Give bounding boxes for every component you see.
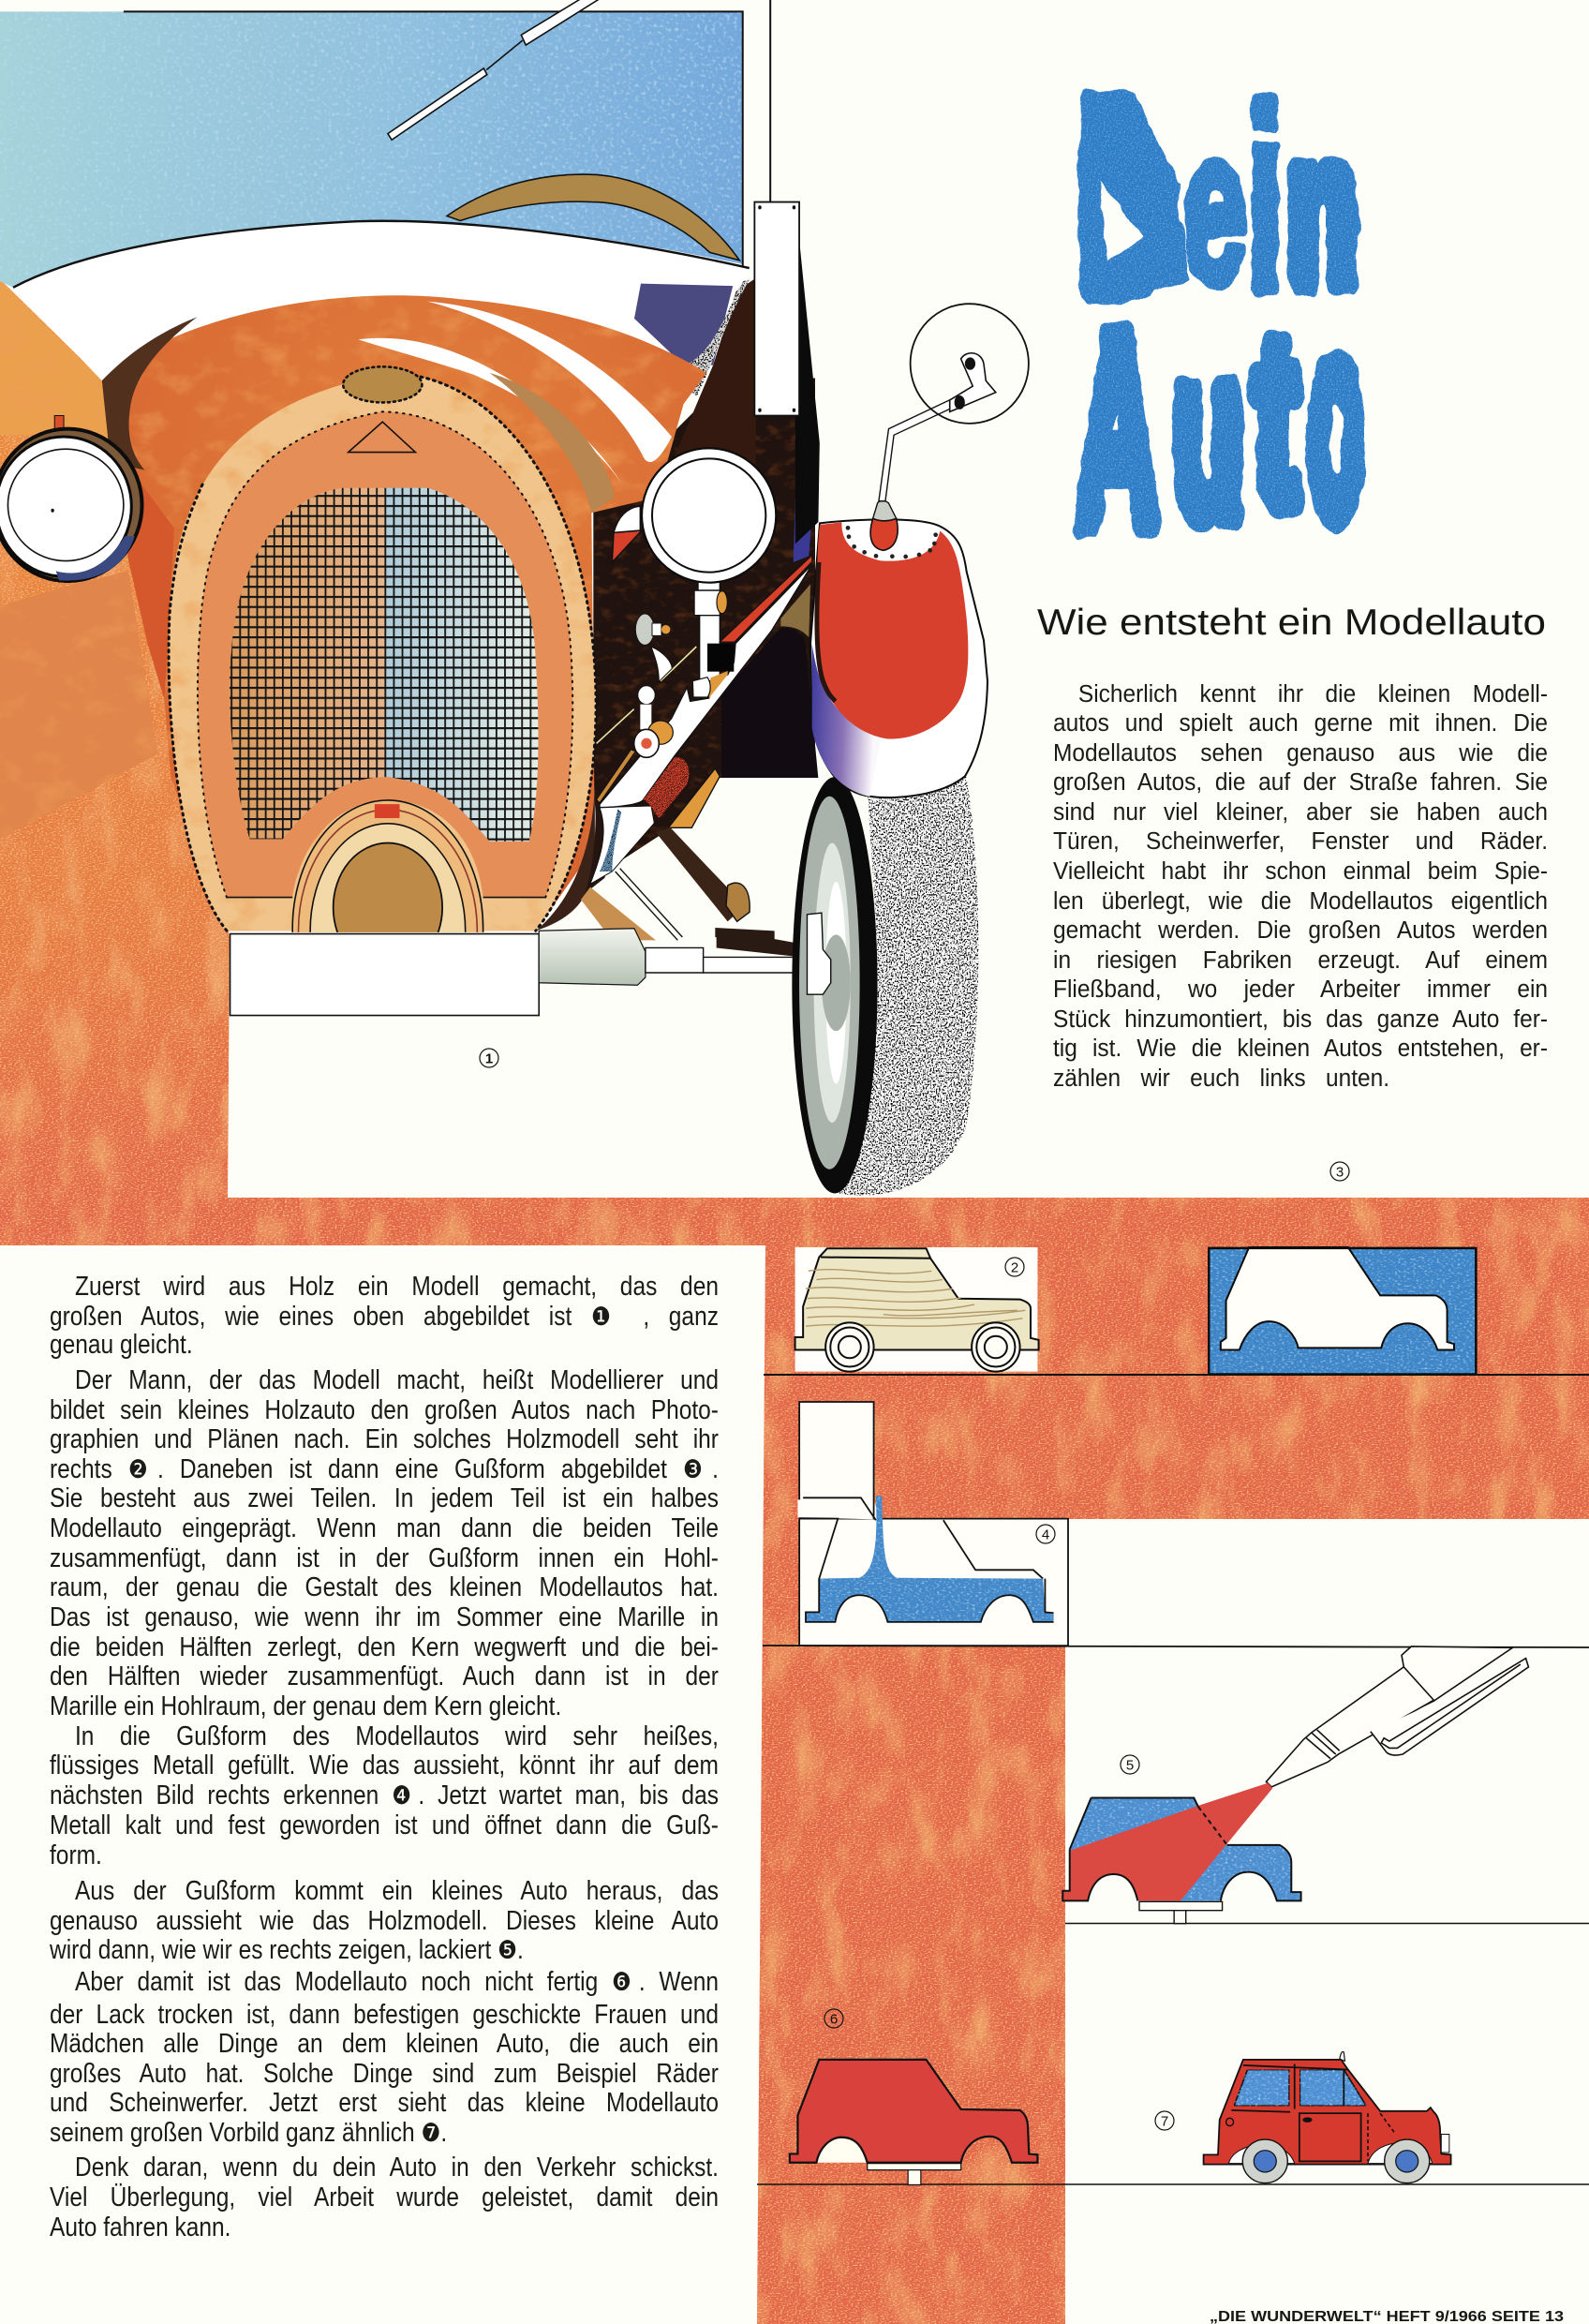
intro text block: in riesigen Fabriken erzeugt. Auf einem xyxy=(1053,947,1548,974)
main text block: Denk daran, wenn du dein Auto in den Verkehr schickst. xyxy=(75,2153,719,2182)
remaining letters: o xyxy=(1308,261,1364,575)
intro text block: len überlegt, wie die Modellautos eigentlich xyxy=(1053,888,1548,915)
step 2: wood model card xyxy=(795,1247,1039,1372)
main text block: Aus der Gußform kommt ein kleines Auto heraus, das xyxy=(75,1876,719,1906)
main text block: Mädchen alle Dinge an dem kleinen Auto, die auch ein xyxy=(50,2029,719,2059)
crank emblem xyxy=(291,799,483,932)
main text block: In die Gußform des Modellautos wird sehr heißes, xyxy=(75,1721,719,1751)
intro text block: Fließband, wo jeder Arbeiter immer ein xyxy=(1053,976,1548,1003)
ground lines xyxy=(757,1375,1589,2184)
D counter and shoulder xyxy=(1100,80,1195,261)
main text block: nächsten Bild rechts erkennen ❹. Jetzt wartet man, bis das xyxy=(50,1780,719,1810)
main text block: Metall kalt und fest geworden ist und öffnet dann die Guß- xyxy=(50,1810,719,1840)
left fender panels xyxy=(0,281,157,839)
main text block: Aber damit ist das Modellauto noch nicht fertig ❻. Wenn xyxy=(75,1967,719,1997)
cowl and hood xyxy=(13,221,756,931)
label 4 xyxy=(1036,1525,1055,1543)
intro text block: autos und spielt auch gerne mit ihnen. Die xyxy=(1053,710,1548,737)
spray gun xyxy=(1266,1646,1528,1787)
main text block: Zuerst wird aus Holz ein Modell gemacht, das den xyxy=(75,1272,719,1302)
number labels xyxy=(480,1049,1349,2130)
main text block: der Lack trocken ist, dann befestigen geschickte Frauen und xyxy=(50,2000,719,2030)
step 5: spray painting xyxy=(1062,1646,1528,1924)
main text block: raum, der genau die Gestalt des kleinen Modellautos hat. xyxy=(50,1572,719,1602)
radiator xyxy=(167,365,605,932)
intro text block: Vielleicht habt ihr schon einmal beim Spie- xyxy=(1053,858,1548,885)
main text block: Modellauto eingeprägt. Wenn man dann die beiden Teile xyxy=(50,1513,719,1543)
steering wheel xyxy=(447,174,739,261)
label 1 xyxy=(480,1049,498,1067)
label 3: 3 xyxy=(1336,1164,1344,1181)
main text block: Sie besteht aus zwei Teilen. In jedem Teil ist ein halbes xyxy=(50,1483,719,1513)
remaining letters xyxy=(1077,53,1364,578)
step 7: finished red car xyxy=(1204,2052,1451,2183)
label 4: 4 xyxy=(1042,1527,1049,1542)
engine compartment xyxy=(593,378,818,874)
radiator cap xyxy=(343,366,422,402)
illustration 1: vintage car front xyxy=(0,0,1029,1196)
windshield glass xyxy=(0,0,770,288)
label 5: 5 xyxy=(1126,1758,1134,1773)
subtitle: Wie entsteht ein Modellauto xyxy=(1037,603,1546,643)
remaining letters: e xyxy=(1184,83,1247,330)
main text block: Der Mann, der das Modell macht, heißt Modellierer und xyxy=(75,1365,719,1395)
main text block: graphien und Plänen nach. Ein solches Holzmodell seht ihr xyxy=(50,1424,719,1454)
intro text block: gemacht werden. Die großen Autos werden xyxy=(1053,917,1548,944)
main text block: Das ist genauso, wie wenn ihr im Sommer eine Marille in xyxy=(50,1602,719,1632)
main text block: form. xyxy=(50,1840,102,1870)
label 6 xyxy=(824,2009,843,2028)
label 3 xyxy=(1330,1162,1349,1181)
main text block: die beiden Hälften zerlegt, den Kern wegwerft und die bei- xyxy=(50,1632,719,1662)
main text block: wird dann, wie wir es rechts zeigen, lackiert ❺. xyxy=(50,1935,524,1965)
intro text block: Sicherlich kennt ihr die kleinen Modell- xyxy=(1078,681,1548,708)
intro text block: tig ist. Wie die kleinen Autos entstehen, er- xyxy=(1053,1035,1548,1062)
dark underside of radiator xyxy=(536,777,595,931)
left headlight xyxy=(0,416,142,581)
blue car body xyxy=(1062,1798,1301,1900)
front suspension xyxy=(581,750,775,949)
mirror xyxy=(879,304,1029,501)
door plate xyxy=(754,202,820,544)
red paint spray xyxy=(1062,1783,1272,1900)
dark brown upper engine bay xyxy=(658,278,756,498)
intro text block: sind nur viel kleiner, aber sie haben auch xyxy=(1053,799,1548,826)
label 7 xyxy=(1155,2111,1174,2130)
label 2 xyxy=(1005,1258,1024,1276)
right headlight and controls xyxy=(597,448,812,818)
main text block: den Hälften wieder zusammenfügt. Auch dann ist in der xyxy=(50,1661,719,1691)
label 2: 2 xyxy=(1011,1259,1018,1276)
intro text block: Modellautos sehen genauso aus wie die xyxy=(1053,740,1548,767)
main text block: flüssiges Metall gefüllt. Wie das aussieht, könnt ihr auf dem xyxy=(50,1750,719,1780)
main text block: genau gleicht. xyxy=(50,1330,193,1360)
triangle emblem xyxy=(349,422,415,453)
label 7: 7 xyxy=(1161,2114,1168,2129)
label 5 xyxy=(1121,1755,1139,1774)
remaining letters: i xyxy=(1246,53,1284,342)
label 1: 1 xyxy=(485,1051,493,1066)
main text block xyxy=(50,1272,719,2242)
axle and base box xyxy=(230,929,811,1016)
step 4: metal pouring into mold xyxy=(797,1402,1068,1646)
intro text block: Türen, Scheinwerfer, Fenster und Räder. xyxy=(1053,828,1548,855)
main text block: Marille ein Hohlraum, der genau dem Kern gleicht. xyxy=(50,1691,561,1721)
intro text block: zählen wir euch links unten. xyxy=(1053,1065,1389,1092)
step 6: painted body xyxy=(790,2060,1037,2184)
main text block: zusammenfügt, dann ist in der Gußform innen ein Hohl- xyxy=(50,1543,719,1573)
main text block: rechts ❷. Daneben ist dann eine Gußform abgebildet ❸. xyxy=(50,1454,719,1484)
main text block: genauso aussieht wie das Holzmodell. Dieses kleine Auto xyxy=(50,1906,719,1936)
wiper xyxy=(388,0,601,140)
remaining letters: n xyxy=(1288,95,1357,325)
main text block: bildet sein kleines Holzauto den großen Autos nach Photo- xyxy=(50,1395,719,1425)
intro text block xyxy=(1053,681,1548,1092)
main text block: Viel Überlegung, viel Arbeit wurde geleistet, damit dein xyxy=(50,2182,719,2212)
intro text block: Stück hinzumontiert, bis das ganze Auto fer- xyxy=(1053,1006,1548,1033)
purple shadow block xyxy=(634,284,733,365)
remaining letters: t xyxy=(1255,283,1299,555)
intro text block: großen Autos, die auf der Straße fahren. Sie xyxy=(1053,769,1548,796)
step 3: casting mold xyxy=(1209,1247,1476,1375)
front wheel xyxy=(792,777,978,1196)
fender xyxy=(810,500,988,797)
main text block: und Scheinwerfer. Jetzt erst sieht das kleine Modellauto xyxy=(50,2088,719,2118)
main text block: großes Auto hat. Solche Dinge sind zum Beispiel Räder xyxy=(50,2059,719,2089)
title: Dein Auto xyxy=(1077,48,1364,578)
label 6: 6 xyxy=(830,2011,838,2028)
letter D: D xyxy=(1077,48,1178,346)
remaining letters: u xyxy=(1173,303,1243,564)
main text block: seinem großen Vorbild ganz ähnlich ❼. xyxy=(50,2118,447,2148)
remaining letters: A xyxy=(1077,280,1158,578)
main text block: Auto fahren kann. xyxy=(50,2212,230,2242)
radiator grille xyxy=(224,482,545,855)
main text block: großen Autos, wie eines oben abgebildet ist ❶ , ganz xyxy=(50,1302,719,1332)
